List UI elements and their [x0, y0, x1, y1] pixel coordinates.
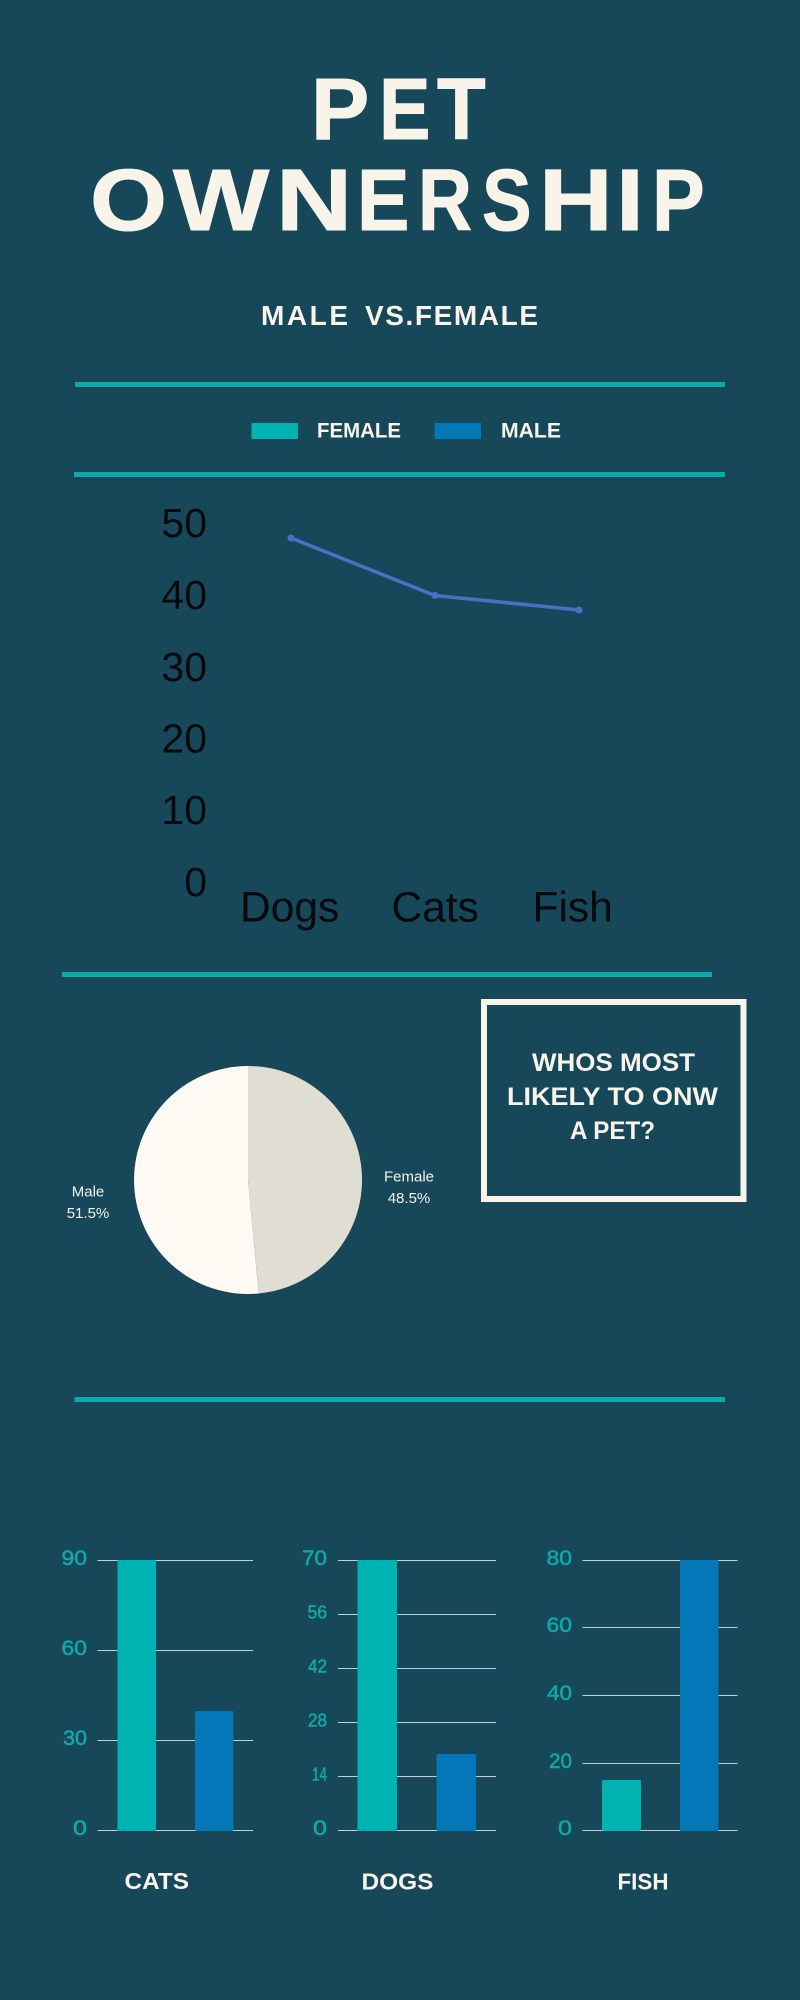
- line chart y axis labels: 40: [161, 572, 207, 618]
- title: H: [539, 152, 612, 249]
- fish axis labels: [546, 1547, 572, 1840]
- title: N: [276, 152, 352, 249]
- title: O: [90, 152, 167, 249]
- fish label: FISH: [618, 1868, 668, 1894]
- callout text: WHOS MOST: [532, 1049, 695, 1077]
- title: W: [173, 152, 269, 249]
- legend label: male: MALE: [501, 418, 561, 442]
- dogs axis labels: 42: [308, 1656, 327, 1676]
- line chart y axis labels: 30: [161, 644, 207, 690]
- pie slice: male: [134, 1066, 259, 1294]
- title: [90, 61, 704, 249]
- dogs axis labels: 0: [313, 1817, 327, 1840]
- cats bar: male: [195, 1711, 234, 1831]
- title: E: [379, 61, 431, 158]
- dogs axis labels: 70: [302, 1547, 327, 1570]
- title: T: [437, 61, 486, 158]
- title: E: [357, 152, 410, 249]
- cats bar: female: [118, 1560, 156, 1831]
- dogs label: DOGS: [362, 1868, 434, 1894]
- pie label: female: [384, 1168, 434, 1207]
- subtitle: MALE: [261, 300, 348, 331]
- dogs axis labels: 28: [308, 1710, 327, 1730]
- pie label: female: 48.5%: [388, 1190, 430, 1207]
- title: I: [616, 152, 644, 249]
- dogs axis labels: 56: [308, 1602, 327, 1622]
- dogs bar: male: [436, 1754, 476, 1831]
- cats axis labels: 30: [63, 1727, 87, 1750]
- dogs axis labels: 14: [312, 1764, 327, 1784]
- legend swatch: male: [434, 423, 481, 439]
- cats axis labels: 60: [62, 1637, 87, 1660]
- bar chart: cats: [62, 1547, 253, 1894]
- cats axis labels: [62, 1547, 87, 1840]
- line chart y axis labels: 20: [161, 716, 207, 762]
- fish axis labels: 60: [546, 1614, 572, 1637]
- pie label: male: Male: [72, 1184, 104, 1200]
- cats axis labels: 0: [73, 1817, 87, 1840]
- line chart y axis labels: [161, 500, 207, 905]
- line chart y axis labels: 10: [161, 787, 207, 833]
- legend swatch: female: [252, 423, 298, 439]
- pie label: male: [67, 1184, 109, 1222]
- callout text: A PET?: [570, 1117, 655, 1145]
- bar chart: dogs: [302, 1547, 496, 1894]
- line chart x axis labels: Fish: [532, 884, 613, 932]
- fish axis labels: 40: [547, 1682, 572, 1705]
- callout text: [507, 1049, 718, 1145]
- legend: [252, 418, 561, 442]
- dogs axis labels: [302, 1547, 327, 1840]
- line series: [288, 534, 582, 614]
- fish axis labels: 20: [549, 1750, 572, 1773]
- callout box: [484, 1002, 744, 1199]
- title: R: [418, 152, 472, 249]
- cats axis labels: 90: [62, 1547, 87, 1570]
- title: P: [311, 61, 369, 158]
- pie label: male: 51.5%: [67, 1205, 109, 1222]
- legend label: female: FEMALE: [317, 418, 401, 442]
- pie chart: [67, 1066, 434, 1294]
- line chart y axis labels: 50: [161, 500, 207, 546]
- subtitle: VS.FEMALE: [365, 300, 538, 331]
- callout text: LIKELY TO ONW: [507, 1083, 718, 1111]
- fish bar: male: [680, 1560, 718, 1831]
- title: P: [652, 152, 704, 249]
- bar chart: fish: [546, 1547, 738, 1894]
- fish bar: female: [602, 1780, 641, 1831]
- line chart y axis labels: 0: [184, 859, 207, 905]
- pie label: female: Female: [384, 1168, 434, 1186]
- line chart x axis labels: Dogs: [240, 884, 339, 932]
- line chart: [161, 500, 651, 932]
- pie slice: female: [248, 1066, 362, 1294]
- fish axis labels: 0: [558, 1817, 572, 1840]
- line chart x axis labels: [240, 884, 613, 932]
- line chart x axis labels: Cats: [392, 884, 479, 932]
- title: S: [482, 152, 532, 249]
- dogs bar: female: [358, 1560, 397, 1831]
- fish axis labels: 80: [546, 1547, 572, 1570]
- cats label: CATS: [124, 1868, 189, 1894]
